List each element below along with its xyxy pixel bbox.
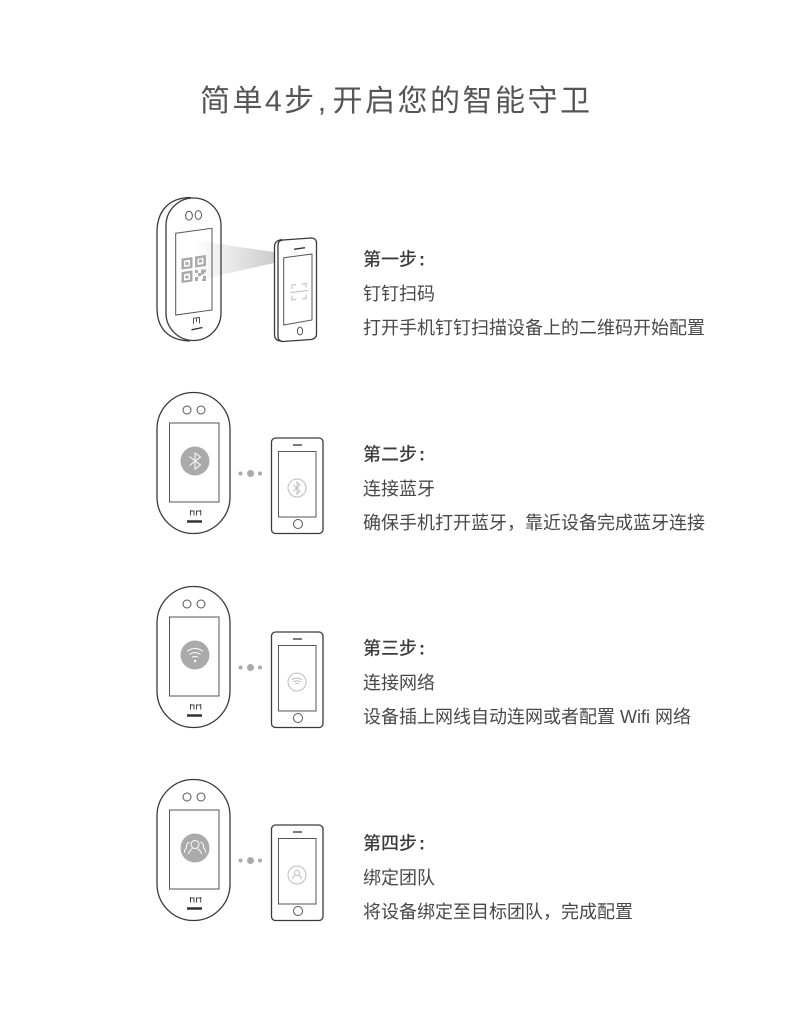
panel: step 4 bbox=[157, 780, 633, 922]
text block: step 1: 打开手机钉钉扫描设备上的二维码开始配置 bbox=[363, 318, 705, 338]
illustration: bluetooth pairing bbox=[157, 392, 323, 534]
text block: step 3: 第三步: bbox=[363, 638, 425, 658]
text block: step 2 bbox=[363, 444, 705, 533]
illustration: tilted device scanning a QR code with phone bbox=[157, 198, 316, 342]
text block: step 1: 第一步: bbox=[363, 250, 425, 270]
icon: phone bbox=[272, 438, 323, 534]
text block: step 4: 绑定团队 bbox=[363, 868, 435, 888]
illustration: team binding bbox=[157, 780, 323, 920]
text block: step 3 bbox=[363, 638, 691, 727]
icon: phone bbox=[272, 825, 323, 920]
connection dots bbox=[238, 664, 262, 671]
icon: access device bbox=[157, 586, 230, 728]
text block: step 2: 连接蓝牙 bbox=[363, 479, 435, 499]
icon: access device bbox=[157, 780, 230, 920]
panel: step 1 bbox=[157, 198, 705, 342]
icon: access device bbox=[157, 392, 230, 534]
icon: phone with scanner bbox=[274, 238, 316, 342]
text block: step 1: 钉钉扫码 bbox=[363, 284, 435, 304]
panel: step 3 bbox=[157, 586, 691, 728]
text block: step 3: 连接网络 bbox=[363, 673, 435, 693]
icon: QR code bbox=[182, 255, 206, 283]
text block: step 4: 第四步: bbox=[363, 834, 425, 854]
text block: step 4: 将设备绑定至目标团队，完成配置 bbox=[363, 902, 633, 922]
text block: step 2: 确保手机打开蓝牙，靠近设备完成蓝牙连接 bbox=[363, 513, 705, 533]
connection dots bbox=[238, 470, 262, 477]
text block: step 3: 设备插上网线自动连网或者配置 Wifi 网络 bbox=[363, 707, 691, 727]
illustration: network connection bbox=[157, 586, 323, 728]
scan beam bbox=[190, 240, 274, 282]
connection dots bbox=[238, 857, 262, 864]
icon: phone bbox=[272, 632, 323, 728]
panel: step 2 bbox=[157, 392, 705, 534]
text block: step 4 bbox=[363, 834, 633, 922]
icon: access device bbox=[157, 198, 221, 341]
text block: step 1 bbox=[363, 250, 705, 338]
title: 简单4步,开启您的智能守卫 bbox=[200, 85, 593, 118]
text block: step 2: 第二步: bbox=[363, 444, 425, 464]
